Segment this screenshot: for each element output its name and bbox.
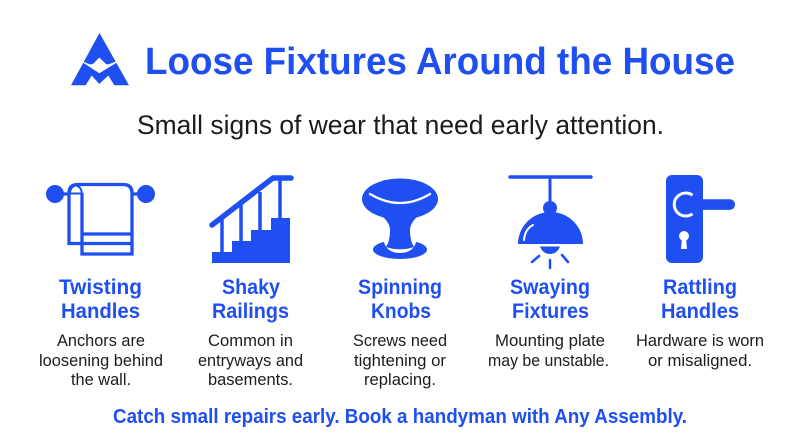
icon: door handle bbox=[666, 175, 735, 263]
description: may be unstable. bbox=[488, 352, 609, 370]
description: basements. bbox=[208, 371, 293, 389]
column: rattling handles bbox=[636, 175, 764, 370]
heading: Shaky bbox=[222, 276, 280, 299]
heading bbox=[510, 276, 590, 323]
column: shaky railings bbox=[198, 178, 303, 389]
description: the wall. bbox=[71, 371, 131, 389]
description bbox=[636, 332, 764, 370]
description bbox=[198, 332, 303, 389]
description: replacing. bbox=[364, 371, 436, 389]
heading: Rattling bbox=[663, 276, 737, 299]
description bbox=[488, 332, 609, 370]
description: loosening behind bbox=[39, 352, 163, 370]
heading: Handles bbox=[61, 300, 140, 323]
column: twisting handles bbox=[39, 184, 163, 389]
title: Loose Fixtures Around the House bbox=[145, 41, 735, 83]
description: Screws need bbox=[353, 332, 447, 350]
description bbox=[353, 332, 447, 389]
description: Mounting plate bbox=[495, 332, 605, 350]
description: tightening or bbox=[354, 352, 446, 370]
heading: Spinning bbox=[358, 276, 442, 299]
icon: staircase bbox=[212, 178, 291, 263]
heading bbox=[212, 276, 289, 323]
heading: Handles bbox=[661, 300, 739, 323]
heading: Swaying bbox=[510, 276, 590, 299]
icon: towel on rail bbox=[46, 184, 155, 254]
description: or misaligned. bbox=[648, 352, 752, 370]
description bbox=[39, 332, 163, 389]
description: Anchors are bbox=[57, 332, 145, 350]
heading: Twisting bbox=[59, 276, 142, 299]
heading bbox=[358, 276, 442, 323]
heading: Knobs bbox=[371, 300, 431, 323]
description: Common in bbox=[208, 332, 293, 350]
heading bbox=[59, 276, 142, 323]
column: swaying fixtures bbox=[488, 177, 609, 370]
heading: Fixtures bbox=[512, 300, 589, 323]
icon: pendant lamp bbox=[510, 177, 591, 268]
heading bbox=[661, 276, 739, 323]
description: Hardware is worn bbox=[636, 332, 764, 350]
subtitle: Small signs of wear that need early attention. bbox=[137, 110, 664, 140]
logo bbox=[71, 33, 129, 85]
icon: cabinet knob bbox=[362, 178, 438, 259]
description: entryways and bbox=[198, 352, 303, 370]
footer call to action: Catch small repairs early. Book a handyman with Any Assembly. bbox=[113, 406, 687, 428]
column: spinning knobs bbox=[353, 178, 447, 389]
heading: Railings bbox=[212, 300, 289, 323]
